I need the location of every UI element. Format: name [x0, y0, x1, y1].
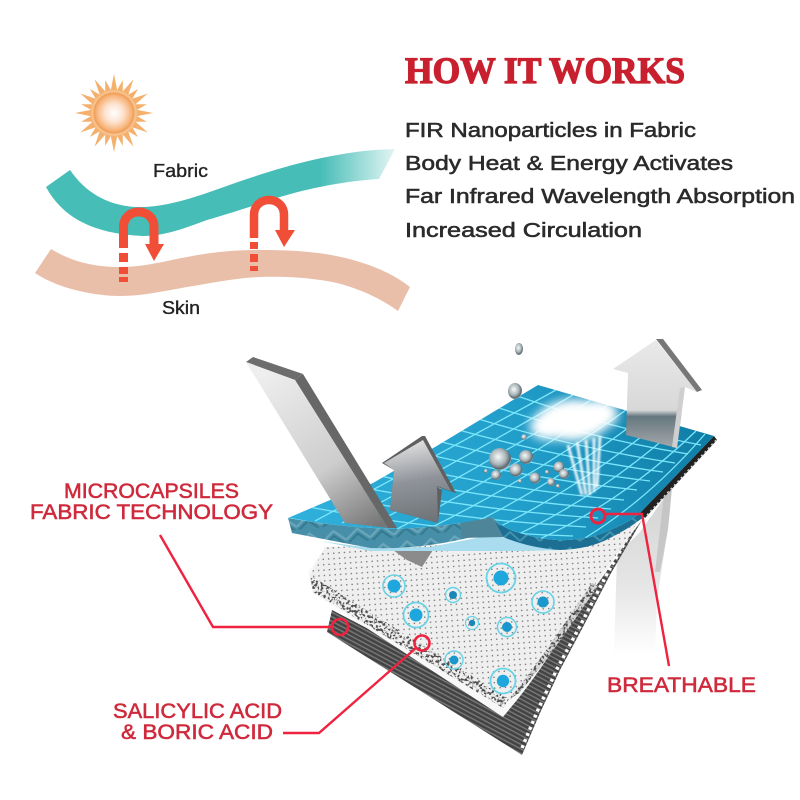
arrow: pale reflected arrow behind layers — [614, 487, 672, 655]
label: breathable: BREATHABLE — [607, 674, 756, 697]
callout: microcapsules leader — [160, 535, 348, 635]
arrow tail beneath top sheet — [390, 548, 433, 567]
capsule dots — [383, 564, 554, 694]
skin band — [35, 249, 410, 311]
arrow: small outbound arrow — [382, 436, 456, 523]
label: Skin: Skin — [162, 298, 200, 318]
arrow: left heat loop — [119, 212, 164, 282]
text block: how it works steps — [405, 120, 795, 242]
layer: blue mesh sheet side edges — [288, 436, 717, 551]
layer: carbon base sheet — [327, 520, 642, 755]
label: salicylic and boric acid — [113, 700, 282, 744]
title: HOW IT WORKS — [405, 51, 685, 92]
text block: how it works steps: Increased Circulation — [405, 220, 642, 242]
panel: layered fabric illustration — [160, 339, 720, 755]
label: salicylic and boric acid: & BORIC ACID — [121, 721, 273, 744]
label: microcapsules fabric technology — [30, 480, 273, 524]
arrow: right outbound arrow — [613, 339, 702, 448]
layer: blue mesh sheet top — [288, 385, 714, 540]
icon: sun — [75, 74, 153, 152]
fabric band — [46, 149, 395, 236]
arrow: large inbound arrow shaft — [246, 357, 397, 528]
label: Fabric: Fabric — [153, 161, 208, 181]
arrow: right heat loop — [250, 200, 295, 271]
layer: white microcapsule sheet — [308, 523, 637, 717]
label: salicylic and boric acid: SALICYLIC ACID — [113, 700, 282, 723]
text block: how it works steps: Far Infrared Wavelength Absorption — [405, 186, 795, 208]
callout: breathable leader — [591, 509, 669, 666]
water droplets — [484, 343, 569, 488]
text block: how it works steps: FIR Nanoparticles in Fabric — [405, 120, 696, 142]
callout: salicylic acid leader — [283, 636, 430, 733]
label: microcapsules fabric technology: FABRIC TECHNOLOGY — [30, 501, 273, 524]
text block: how it works steps: Body Heat & Energy Activates — [405, 153, 733, 175]
steam cloud and spray — [530, 399, 618, 495]
label: microcapsules fabric technology: MICROCAPSILES — [64, 480, 239, 503]
panel: fabric and skin diagram — [35, 74, 410, 318]
